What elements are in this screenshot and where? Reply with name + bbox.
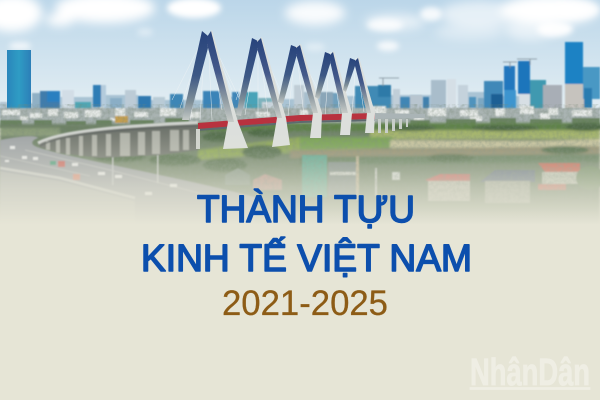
photo grain [0, 104, 600, 204]
city skyline [0, 42, 600, 118]
sky [0, 0, 600, 125]
hazy background buildings [0, 92, 560, 115]
title line 1: THÀNH TỰU [197, 188, 415, 231]
cream fade over photo [0, 130, 600, 225]
bridge pylons [182, 30, 375, 149]
cranes [379, 59, 537, 86]
pylon 1 [182, 30, 248, 149]
title [141, 188, 472, 280]
pylon 5 [343, 57, 375, 133]
pylon 3 [278, 44, 322, 138]
pylon 4 [315, 51, 352, 135]
elevated approach road [38, 122, 198, 158]
highway [0, 133, 255, 235]
pylon 2 [236, 37, 290, 147]
village houses [225, 155, 600, 203]
tree clumps [94, 123, 600, 172]
red bridge deck [196, 113, 425, 149]
subtitle years: 2021-2025 [222, 284, 388, 323]
title line 2: KINH TẾ VIỆT NAM [141, 236, 472, 280]
midground river banks [0, 123, 600, 234]
cars [5, 146, 177, 195]
left glass tower [7, 50, 31, 113]
photo: Nhat Tan bridge and Hanoi skyline [0, 0, 600, 235]
low-rise rooftops [0, 106, 600, 128]
clouds [0, 0, 600, 51]
bridge cables [172, 35, 364, 120]
